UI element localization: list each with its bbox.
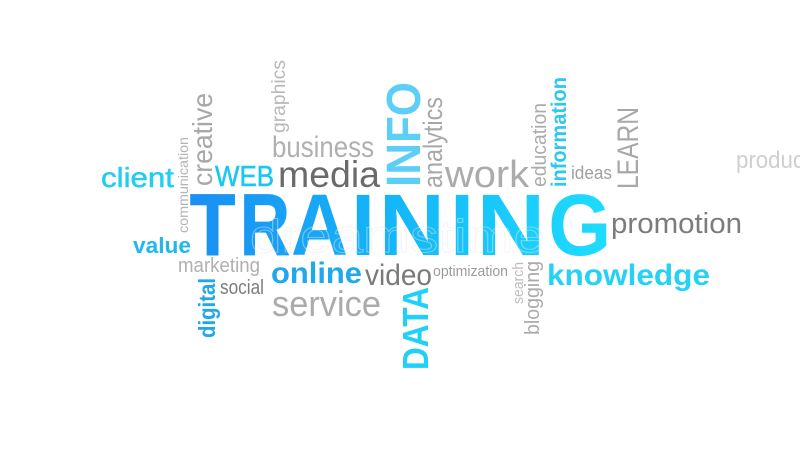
word: value: value: [133, 233, 191, 258]
word: digital: digital: [194, 278, 220, 338]
watermark: dreamstime: [250, 210, 545, 262]
word: blogging: blogging: [522, 261, 544, 335]
title: TRAINING: T: [190, 177, 235, 274]
word: optimization: optimization: [433, 263, 508, 280]
word: WEB: WEB: [215, 161, 274, 193]
word: marketing: marketing: [178, 255, 260, 277]
word: knowledge: knowledge: [547, 259, 710, 292]
word: online: online: [271, 257, 362, 290]
title: TRAINING: A: [291, 177, 348, 274]
word: search: search: [510, 262, 527, 304]
word: service: service: [272, 283, 381, 324]
title: TRAINING: N: [379, 177, 445, 274]
word: graphics: graphics: [269, 60, 290, 133]
title: TRAINING: R: [240, 177, 290, 274]
word: INFO: INFO: [378, 82, 431, 187]
word: media: media: [278, 154, 380, 195]
word: information: information: [548, 77, 571, 187]
word: creative: creative: [187, 93, 218, 186]
title: TRAINING: I: [351, 177, 375, 274]
word: DATA: DATA: [395, 287, 436, 370]
title: TRAINING: G: [548, 177, 611, 274]
word: promotion: promotion: [611, 208, 742, 240]
word: business: business: [272, 131, 374, 164]
word: analytics: analytics: [418, 97, 448, 188]
title: TRAINING: N: [477, 177, 545, 274]
word: work: work: [444, 154, 530, 196]
word: communication: communication: [175, 137, 191, 233]
word: education: education: [529, 103, 551, 187]
word: social: social: [220, 277, 264, 299]
word: LEARN: LEARN: [612, 107, 645, 189]
title: TRAINING: I: [450, 177, 474, 274]
word: ideas: ideas: [571, 163, 612, 183]
word: video: video: [365, 259, 432, 292]
title: TRAINING: [190, 177, 611, 274]
word: client: client: [101, 162, 174, 193]
